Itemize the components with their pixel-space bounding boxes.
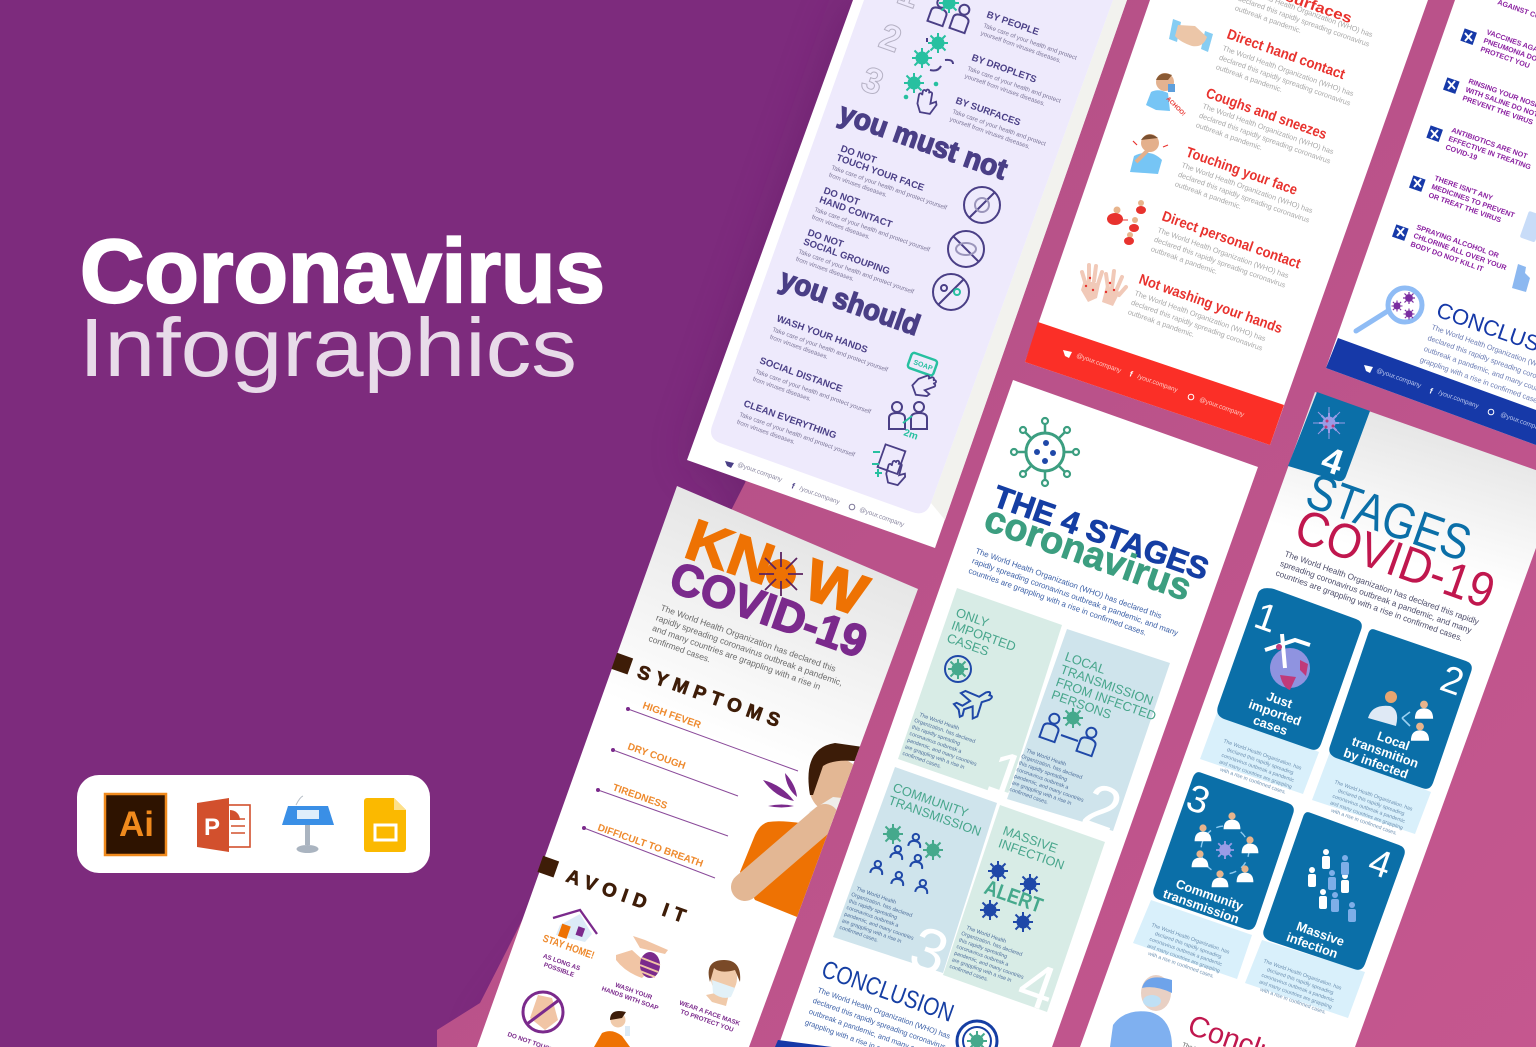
text: clean everything: from viruses diseases. — [736, 419, 796, 446]
text: not washing: declared this rapidly spreading coronavirus — [1130, 298, 1264, 353]
symptom list: HIGH FEVER — [641, 700, 703, 731]
card: community transmission: Community — [1174, 876, 1245, 914]
icon: alert — [980, 861, 1046, 932]
card: just imported: with a rise in confirmed cases. — [1219, 767, 1287, 796]
blue footer strip — [775, 1040, 832, 1047]
card: stage 4: are grappling with a rise in — [951, 957, 1012, 984]
text: wash your hands: from viruses diseases. — [769, 334, 829, 361]
icon: green virus — [1011, 418, 1079, 486]
text: touching face — [1174, 145, 1314, 234]
text: by droplets: yourself from viruses diseases. — [964, 73, 1046, 108]
text: touching face: Touching your face — [1184, 145, 1299, 199]
text: coughs: declared this rapidly spreading coronavirus — [1198, 111, 1332, 166]
text: by surfaces: BY SURFACES — [954, 95, 1022, 129]
card: stage 3: COMMUNITY — [891, 780, 970, 820]
card: massive infection: infection — [1285, 929, 1340, 961]
icon: globe and plane — [1265, 634, 1310, 690]
text: social distance: Take care of your health and protect yourself — [754, 368, 872, 416]
text: do not hand contact — [811, 185, 931, 261]
symptom list: DRY COUGH — [626, 741, 687, 772]
card: stage 4 — [943, 805, 1105, 1025]
text: myth 4: MEDICINES TO PREVENT — [1430, 182, 1517, 220]
text: do not touch: from viruses diseases. — [828, 172, 888, 199]
card: stage 3: TRANSMISSION — [886, 792, 983, 839]
text: wash your hands: WASH YOUR HANDS — [775, 313, 870, 356]
social footer — [1364, 365, 1536, 434]
numerals: 3 — [856, 58, 889, 103]
icon: ringed virus — [957, 1021, 997, 1047]
text: myth 4: OR TREAT THE VIRUS — [1427, 190, 1503, 224]
text: direct personal contact: The World Health Organization (WHO) has — [1156, 225, 1290, 280]
card: stage 3: pandemic, and many countries — [843, 912, 915, 942]
text: myth 4: THERE ISN'T ANY — [1433, 173, 1494, 202]
card: stage 3 — [833, 767, 997, 990]
card: stage 1: coronavirus outbreak a — [908, 731, 962, 755]
text: direct hand contact: Direct hand contact — [1225, 27, 1347, 83]
card: just imported: declared this rapidly spreading — [1226, 747, 1294, 776]
card: just imported: cases — [1251, 712, 1290, 738]
text: by droplets: Take care of your health and protect — [966, 65, 1062, 105]
text: direct personal contact: Direct personal contact — [1160, 209, 1303, 273]
text: by people: BY PEOPLE — [985, 9, 1041, 38]
social footer: @your.company — [1075, 352, 1123, 375]
text: direct personal contact: outbreak a pandemic. — [1150, 244, 1219, 276]
card: massive infection: 4 — [1363, 841, 1397, 888]
icon: virus as letter o — [759, 552, 803, 596]
text: coughs: Coughs and sneezes — [1204, 86, 1329, 143]
card: stage 2: are grappling with a rise in — [1011, 780, 1072, 807]
text: clean everything: Take care of your health and protect yourself — [738, 411, 856, 459]
text: not washing: Not washing your hands — [1137, 272, 1284, 337]
card: stage 1: pandemic, and many countries — [906, 738, 978, 768]
icon: community ring — [1192, 812, 1258, 887]
card: stage 3: The World Health — [855, 886, 897, 906]
social footer: f — [1128, 369, 1134, 379]
text: intro: rapidly spreading coronavirus outbreak a pandemic, — [655, 612, 844, 688]
icon: sneezing person — [1146, 73, 1186, 118]
icon: Illustrator: Ai — [119, 805, 154, 844]
text: social distance: from viruses diseases. — [752, 376, 812, 403]
icon: touching face — [1130, 134, 1168, 174]
icon: droplets — [912, 33, 953, 70]
card: stage 3: Organization. has declared — [850, 892, 913, 919]
text: direct hand contact — [1215, 27, 1355, 117]
card: stage 2: TRANSMISSION — [1058, 661, 1155, 708]
icon: face mask — [706, 960, 740, 1006]
icon: crowd — [1308, 849, 1356, 922]
card: massive infection: and many countries are grappling — [1258, 979, 1333, 1011]
panel: know covid-19 — [477, 486, 918, 1047]
text: intro: spreading coronavirus outbreak a pandemic, and many — [1279, 558, 1474, 635]
card: stage 1: confirmed cases. — [901, 751, 942, 770]
card: stage 1: this rapidly spreading — [911, 724, 961, 747]
icon: clean surface — [872, 444, 909, 486]
text: by droplets — [964, 52, 1062, 112]
heading: know: KN — [678, 507, 782, 598]
text: coughs: The World Health Organization (WHO) has — [1201, 101, 1335, 156]
card: just imported — [1200, 588, 1362, 798]
card: stage 1 — [898, 588, 1062, 814]
text: touching face: outbreak a pandemic. — [1174, 179, 1243, 211]
text: myth 3: ANTIBIOTICS ARE NOT — [1450, 125, 1529, 161]
symptom list: DIFFICULT TO BREATH — [596, 822, 704, 870]
icon: Keynote — [282, 796, 334, 853]
text: do not hand contact: DO NOT — [822, 185, 861, 208]
social footer: /your.company — [1136, 373, 1179, 394]
text: clean everything — [736, 398, 856, 466]
card: local transmission: The World Health Organization. has — [1334, 779, 1413, 813]
card: local transmission: 2 — [1435, 658, 1469, 705]
card: community transmission: transmission — [1161, 886, 1241, 927]
text: intro: The World Health Organization (WHO) has declared this — [974, 546, 1163, 621]
text: intro: countries are grappling with a rise in confirmed cases. — [967, 566, 1148, 637]
heading: symptoms: SYMPTOMS — [634, 662, 783, 732]
card: just imported: coronavirus outbreak a pandemic — [1221, 753, 1295, 784]
illustration: person coughing — [731, 743, 860, 917]
card: local transmission: by infected — [1342, 745, 1410, 782]
card: stage 1: IMPORTED — [949, 617, 1018, 654]
card: stage 4: The World Health — [965, 925, 1007, 945]
text: social distance — [752, 355, 872, 423]
card: stage 1: Organization. has declared — [913, 718, 976, 745]
text: mask caption: TO PROTECT YOU — [679, 1009, 735, 1034]
text: coughs: outbreak a pandemic. — [1195, 120, 1264, 152]
card: community transmission — [1133, 772, 1294, 982]
text: do not group: DO NOT — [806, 227, 845, 250]
text: do not hand contact: Take care of your health and protect yourself — [813, 206, 931, 254]
text: intro: rapidly spreading coronavirus outbreak a pandemic, and many — [971, 556, 1179, 638]
text: do not touch: TOUCH YOUR FACE — [835, 153, 926, 194]
card: just imported: The World Health Organization. has — [1223, 738, 1302, 772]
card: stage 2: PERSONS — [1049, 687, 1113, 722]
icon: two metres distance — [889, 402, 927, 443]
icon: bottle — [1512, 264, 1530, 292]
social footer — [1063, 350, 1246, 419]
text: do not hand contact: HAND CONTACT — [818, 195, 894, 231]
red footer — [1025, 322, 1284, 445]
panel: the 4 stages coronavirus — [775, 380, 1258, 1047]
card: massive infection: Massive — [1295, 918, 1346, 949]
tab: 4 with virus: 4 — [1316, 438, 1349, 483]
text: wash caption: WASH YOUR — [614, 982, 653, 1001]
card: stage 2: FROM INFECTED — [1054, 674, 1158, 723]
heading: you should: you should — [776, 263, 924, 342]
icon: PowerPoint — [197, 798, 250, 852]
icon: person orange — [594, 1011, 630, 1047]
text: social distance: SOCIAL DISTANCE — [758, 355, 844, 395]
card: stage 2: The World Health — [1025, 748, 1067, 768]
social footer: @your.company — [1375, 367, 1423, 390]
card: massive infection: The World Health Organization. has — [1263, 958, 1342, 992]
text: not washing — [1127, 272, 1284, 362]
text: by droplets: BY DROPLETS — [970, 52, 1038, 86]
card: just imported: and many countries are grappling — [1218, 759, 1293, 791]
card: massive infection: coronavirus outbreak a pandemic — [1261, 973, 1335, 1004]
social footer: @your.company — [1198, 396, 1246, 419]
social footer: f — [790, 481, 796, 491]
text: do not group: SOCIAL GROUPING — [802, 237, 891, 277]
card: stage 3: 3 — [901, 913, 957, 990]
numerals: 2 — [874, 15, 907, 60]
icons: prohibition circles — [933, 187, 1000, 310]
icon: wash hands — [616, 936, 668, 978]
card: stage 2: 2 — [1074, 770, 1130, 847]
text: intro: The World Health Organization has declared this rapidly — [1283, 548, 1480, 626]
text: not washing: The World Health Organization (WHO) has — [1133, 288, 1267, 343]
text: by people: Take care of your health and protect — [982, 22, 1078, 62]
text: wash caption: HANDS WITH SOAP — [601, 986, 659, 1012]
card: stage 3: this rapidly spreading — [848, 898, 898, 921]
text: conclusion body: The World Health Organization (WHO) has — [816, 985, 952, 1041]
card: stage 4: INFECTION — [996, 835, 1067, 873]
text: intro: countries are grappling with a rise in confirmed cases. — [1274, 568, 1464, 643]
social footer: /your.company — [798, 485, 841, 506]
card: stage 1: CASES — [945, 630, 991, 659]
card: stage 2: LOCAL — [1063, 649, 1108, 677]
text: not washing: outbreak a pandemic. — [1127, 307, 1196, 339]
card: community transmission: The World Health Organization. has — [1151, 922, 1230, 956]
card: stage 3: confirmed cases. — [838, 925, 879, 944]
text: do not touch: Take care of your health and protect yourself — [830, 164, 948, 212]
heading: covid-19: COVID-19 — [664, 551, 874, 668]
icon: soap — [907, 352, 940, 399]
icon: PowerPoint: P — [204, 814, 220, 841]
text: as long as possible: AS LONG AS — [542, 953, 581, 972]
heading: covid-19: COVID-19 — [1288, 499, 1501, 619]
symptom list: TIREDNESS — [611, 782, 669, 812]
icon: community people — [870, 824, 943, 894]
social footer: /your.company — [1437, 389, 1480, 410]
card: just imported: Just — [1265, 688, 1294, 711]
text: myth 2: PREVENT THE VIRUS — [1461, 93, 1535, 127]
heading: stages: STAGES — [1299, 463, 1478, 572]
heading: avoid it: AVOID IT — [563, 866, 689, 928]
heading: know — [678, 507, 876, 629]
card: stage 3: are grappling with a rise in — [841, 918, 902, 945]
card: local transmission — [1312, 629, 1472, 839]
heading: know: W — [796, 547, 876, 629]
text: intro: The World Health Organization has declared this — [659, 602, 837, 674]
panel: how it spreads, red — [1025, 0, 1428, 445]
panel shadow on purple — [480, 0, 930, 1047]
text: do not group — [795, 227, 915, 303]
card: community transmission: coronavirus outbreak a pandemic — [1149, 937, 1223, 968]
icon: stay home — [541, 910, 597, 962]
card: stage 2: confirmed cases. — [1008, 787, 1049, 806]
icon: magnifier — [1356, 288, 1422, 331]
card: stage 1: ONLY — [954, 605, 991, 630]
icon: stay home: STAY HOME! — [541, 933, 596, 962]
text: by surfaces: Take care of your health and protect — [951, 108, 1047, 148]
text: clean everything: CLEAN EVERYTHING — [742, 398, 838, 441]
card: local transmission: Local — [1375, 728, 1412, 753]
card: just imported: 1 — [1249, 595, 1283, 642]
text: myth 1: PROTECT YOU — [1479, 44, 1531, 70]
text: do not group: from viruses diseases. — [795, 256, 855, 283]
text: by people: yourself from viruses diseases. — [980, 30, 1062, 65]
text: intro: and many countries are grappling with a rise in — [651, 623, 822, 692]
card: community transmission: declared this rapidly spreading — [1154, 931, 1222, 960]
title: Infographics — [79, 301, 577, 394]
icon: people transmission — [927, 0, 974, 33]
card: local transmission: coronavirus outbreak a pandemic — [1332, 794, 1406, 825]
card: massive infection — [1245, 812, 1405, 1018]
text: wash your hands: Take care of your health and protect yourself — [771, 326, 889, 374]
social footer: @your.company — [736, 461, 784, 484]
card: stage 2: pandemic, and many countries — [1013, 774, 1085, 804]
text: by surfaces: yourself from viruses diseases. — [949, 116, 1031, 151]
icon: soap: SOAP — [912, 359, 934, 373]
social footer: @your.company — [858, 506, 906, 529]
icon: red people contact — [1107, 200, 1146, 245]
tab: 4 with virus — [1288, 392, 1370, 483]
card: stage 4: Organization. has declared — [960, 931, 1023, 958]
title: Coronavirus — [80, 222, 605, 322]
text: do not group: Take care of your health and protect yourself — [797, 248, 915, 296]
card: local transmission: and many countries are grappling — [1329, 800, 1404, 832]
card: community transmission: 3 — [1181, 777, 1215, 824]
text: direct personal contact — [1150, 209, 1303, 299]
card: community transmission: with a rise in confirmed cases. — [1147, 951, 1215, 980]
text: intro: confirmed cases. — [647, 633, 712, 664]
text: surfaces: outbreak a pandemic. — [1234, 3, 1303, 35]
text: myth 5: SPRAYING ALCOHOL OR — [1415, 222, 1500, 260]
social footer — [725, 461, 906, 529]
text: touching face: The World Health Organization (WHO) has — [1180, 160, 1314, 215]
card: stage 1: The World Health — [918, 712, 960, 732]
card: stage 4: pandemic, and many countries — [953, 951, 1025, 981]
card: just imported: imported — [1247, 696, 1303, 729]
text: do not touch — [828, 143, 948, 219]
text: do not touch: DO NOT — [839, 143, 878, 166]
icon: Illustrator — [105, 794, 166, 855]
heading: coronavirus: coronavirus — [979, 498, 1197, 610]
card: local transmission: declared this rapidly spreading — [1337, 788, 1405, 817]
card: stage 4: this rapidly spreading — [958, 937, 1008, 960]
text: direct hand contact: outbreak a pandemic. — [1215, 62, 1284, 94]
text: touching face: declared this rapidly spreading coronavirus — [1177, 170, 1311, 225]
text: direct hand contact: The World Health Organization (WHO) has — [1221, 43, 1355, 98]
text: mask caption: WEAR A FACE MASK — [678, 1000, 741, 1028]
icon: no touching — [523, 992, 563, 1032]
card: stage 4: confirmed cases. — [948, 964, 989, 983]
icon: virus and plane — [945, 656, 997, 723]
text: wash your hands — [769, 313, 889, 381]
text: coughs — [1195, 86, 1335, 175]
card: massive infection: with a rise in confirmed cases. — [1259, 987, 1327, 1016]
blue footer — [1326, 338, 1536, 445]
text: myth 3: COVID-19 — [1444, 142, 1479, 162]
panel: how it spreads, lavender — [687, 0, 1127, 548]
card: local transmission: transmition — [1350, 733, 1421, 771]
card: stage 1: are grappling with a rise in — [904, 744, 965, 771]
heading: you must not: you must not — [835, 97, 1012, 186]
card: community transmission: and many countries are grappling — [1146, 943, 1221, 975]
text: direct personal contact: declared this rapidly spreading coronavirus — [1153, 235, 1287, 290]
text: by surfaces — [949, 95, 1047, 155]
icon: hand on surface — [904, 73, 939, 115]
heading: the 4 stages: THE 4 STAGES — [989, 479, 1213, 587]
card: massive infection: declared this rapidly spreading — [1266, 967, 1334, 996]
symptom list — [582, 700, 798, 878]
title — [79, 222, 605, 394]
card: stage 4: coronavirus outbreak a — [955, 944, 1009, 968]
icon: two metres distance: 2m — [902, 427, 919, 443]
card: stage 4: MASSIVE — [1001, 823, 1060, 856]
text: as long as possible: POSSIBLE — [543, 962, 575, 979]
software badges card — [77, 775, 430, 873]
checklist — [1392, 28, 1477, 241]
text: direct hand contact: declared this rapidly spreading coronavirus — [1218, 53, 1352, 108]
card: stage 2: coronavirus outbreak a — [1015, 767, 1069, 791]
icon: sneezing person and contacts — [1368, 691, 1433, 741]
icon: persons and virus — [1039, 708, 1101, 756]
social footer: f — [1428, 386, 1434, 396]
text: myth 5: BODY DO NOT KILL IT — [1409, 239, 1485, 274]
pink backdrop — [437, 0, 1536, 1047]
icon: alert: ALERT — [981, 876, 1046, 918]
icon: Google Slides — [364, 798, 406, 852]
icon: clipboard — [1520, 211, 1536, 243]
panel: myths, blue — [1326, 0, 1536, 445]
text: myth 3: EFFECTIVE IN TREATING — [1447, 134, 1533, 172]
card: stage 4: 4 — [1009, 948, 1065, 1025]
icon: handshake — [1169, 19, 1213, 52]
card: local transmission: with a rise in confirmed cases. — [1330, 808, 1398, 837]
text: myth 5: CHLORINE ALL OVER YOUR — [1412, 231, 1509, 272]
icon: sneezing person: ACHOO! — [1165, 96, 1186, 118]
card: stage 2: this rapidly spreading — [1018, 760, 1068, 783]
heading: conclusion: CONCLUSION — [818, 955, 957, 1028]
card: stage 2: Organization. has declared — [1020, 754, 1083, 781]
icon: doctor — [1110, 975, 1172, 1047]
numerals — [856, 0, 925, 103]
text: by people — [980, 9, 1078, 69]
card: stage 3: coronavirus outbreak a — [845, 905, 899, 929]
card: stage 1: 1 — [978, 737, 1034, 814]
icon: dirty hands — [1081, 265, 1126, 306]
card: stage 2 — [1007, 629, 1170, 847]
text: do not hand contact: from viruses diseases. — [811, 214, 871, 241]
panel: 4 stages covid-19 — [1080, 392, 1536, 1047]
